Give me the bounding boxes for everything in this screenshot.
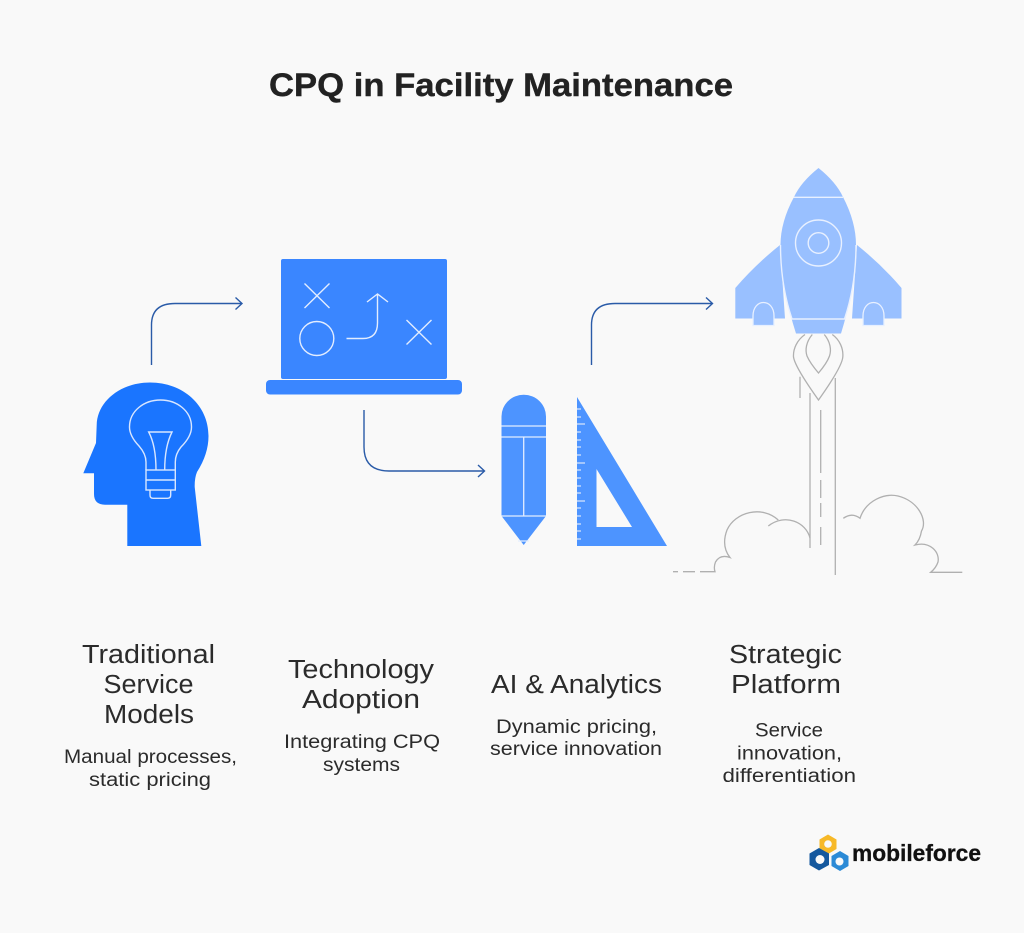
icon: rocket (735, 168, 902, 334)
column: strategic platform: Platform (731, 671, 841, 699)
column: traditional service models: Service (104, 671, 194, 699)
icon: head with light bulb (83, 382, 208, 546)
column: technology adoption: Technology (288, 656, 434, 684)
logo: mobileforce (810, 834, 981, 871)
column: AI and analytics: AI & Analytics (491, 671, 662, 699)
column: traditional service models: static pricing (89, 770, 211, 791)
column: strategic platform: innovation, (737, 744, 842, 764)
column: AI and analytics: Dynamic pricing, (496, 717, 657, 738)
column: traditional service models (64, 641, 237, 791)
column: traditional service models: Manual processes, (64, 747, 237, 768)
icon: set square ruler (577, 397, 667, 546)
column: technology adoption: Integrating CPQ (284, 732, 440, 753)
column: technology adoption: systems (323, 755, 400, 776)
column: traditional service models: Models (104, 701, 194, 729)
logo: mobileforce: mobileforce (852, 840, 981, 866)
column: strategic platform: Strategic (729, 641, 842, 669)
arrow: laptop to pencil and ruler (364, 410, 484, 477)
column: technology adoption: Adoption (302, 686, 420, 714)
icon: rocket flame and smoke trail (673, 334, 962, 575)
column: strategic platform: differentiation (722, 766, 856, 787)
column: technology adoption (284, 656, 440, 776)
arrow: head to laptop (152, 298, 242, 365)
arrow: tools to rocket (592, 298, 712, 365)
column: AI and analytics: service innovation (490, 739, 662, 760)
icon: pencil (502, 395, 546, 545)
column: strategic platform (722, 641, 856, 787)
column: traditional service models: Traditional (82, 641, 215, 669)
icon: laptop with strategy board (266, 259, 462, 394)
title: CPQ in Facility Maintenance (269, 67, 733, 103)
column: strategic platform: Service (755, 720, 823, 742)
column: AI and analytics (490, 671, 662, 760)
